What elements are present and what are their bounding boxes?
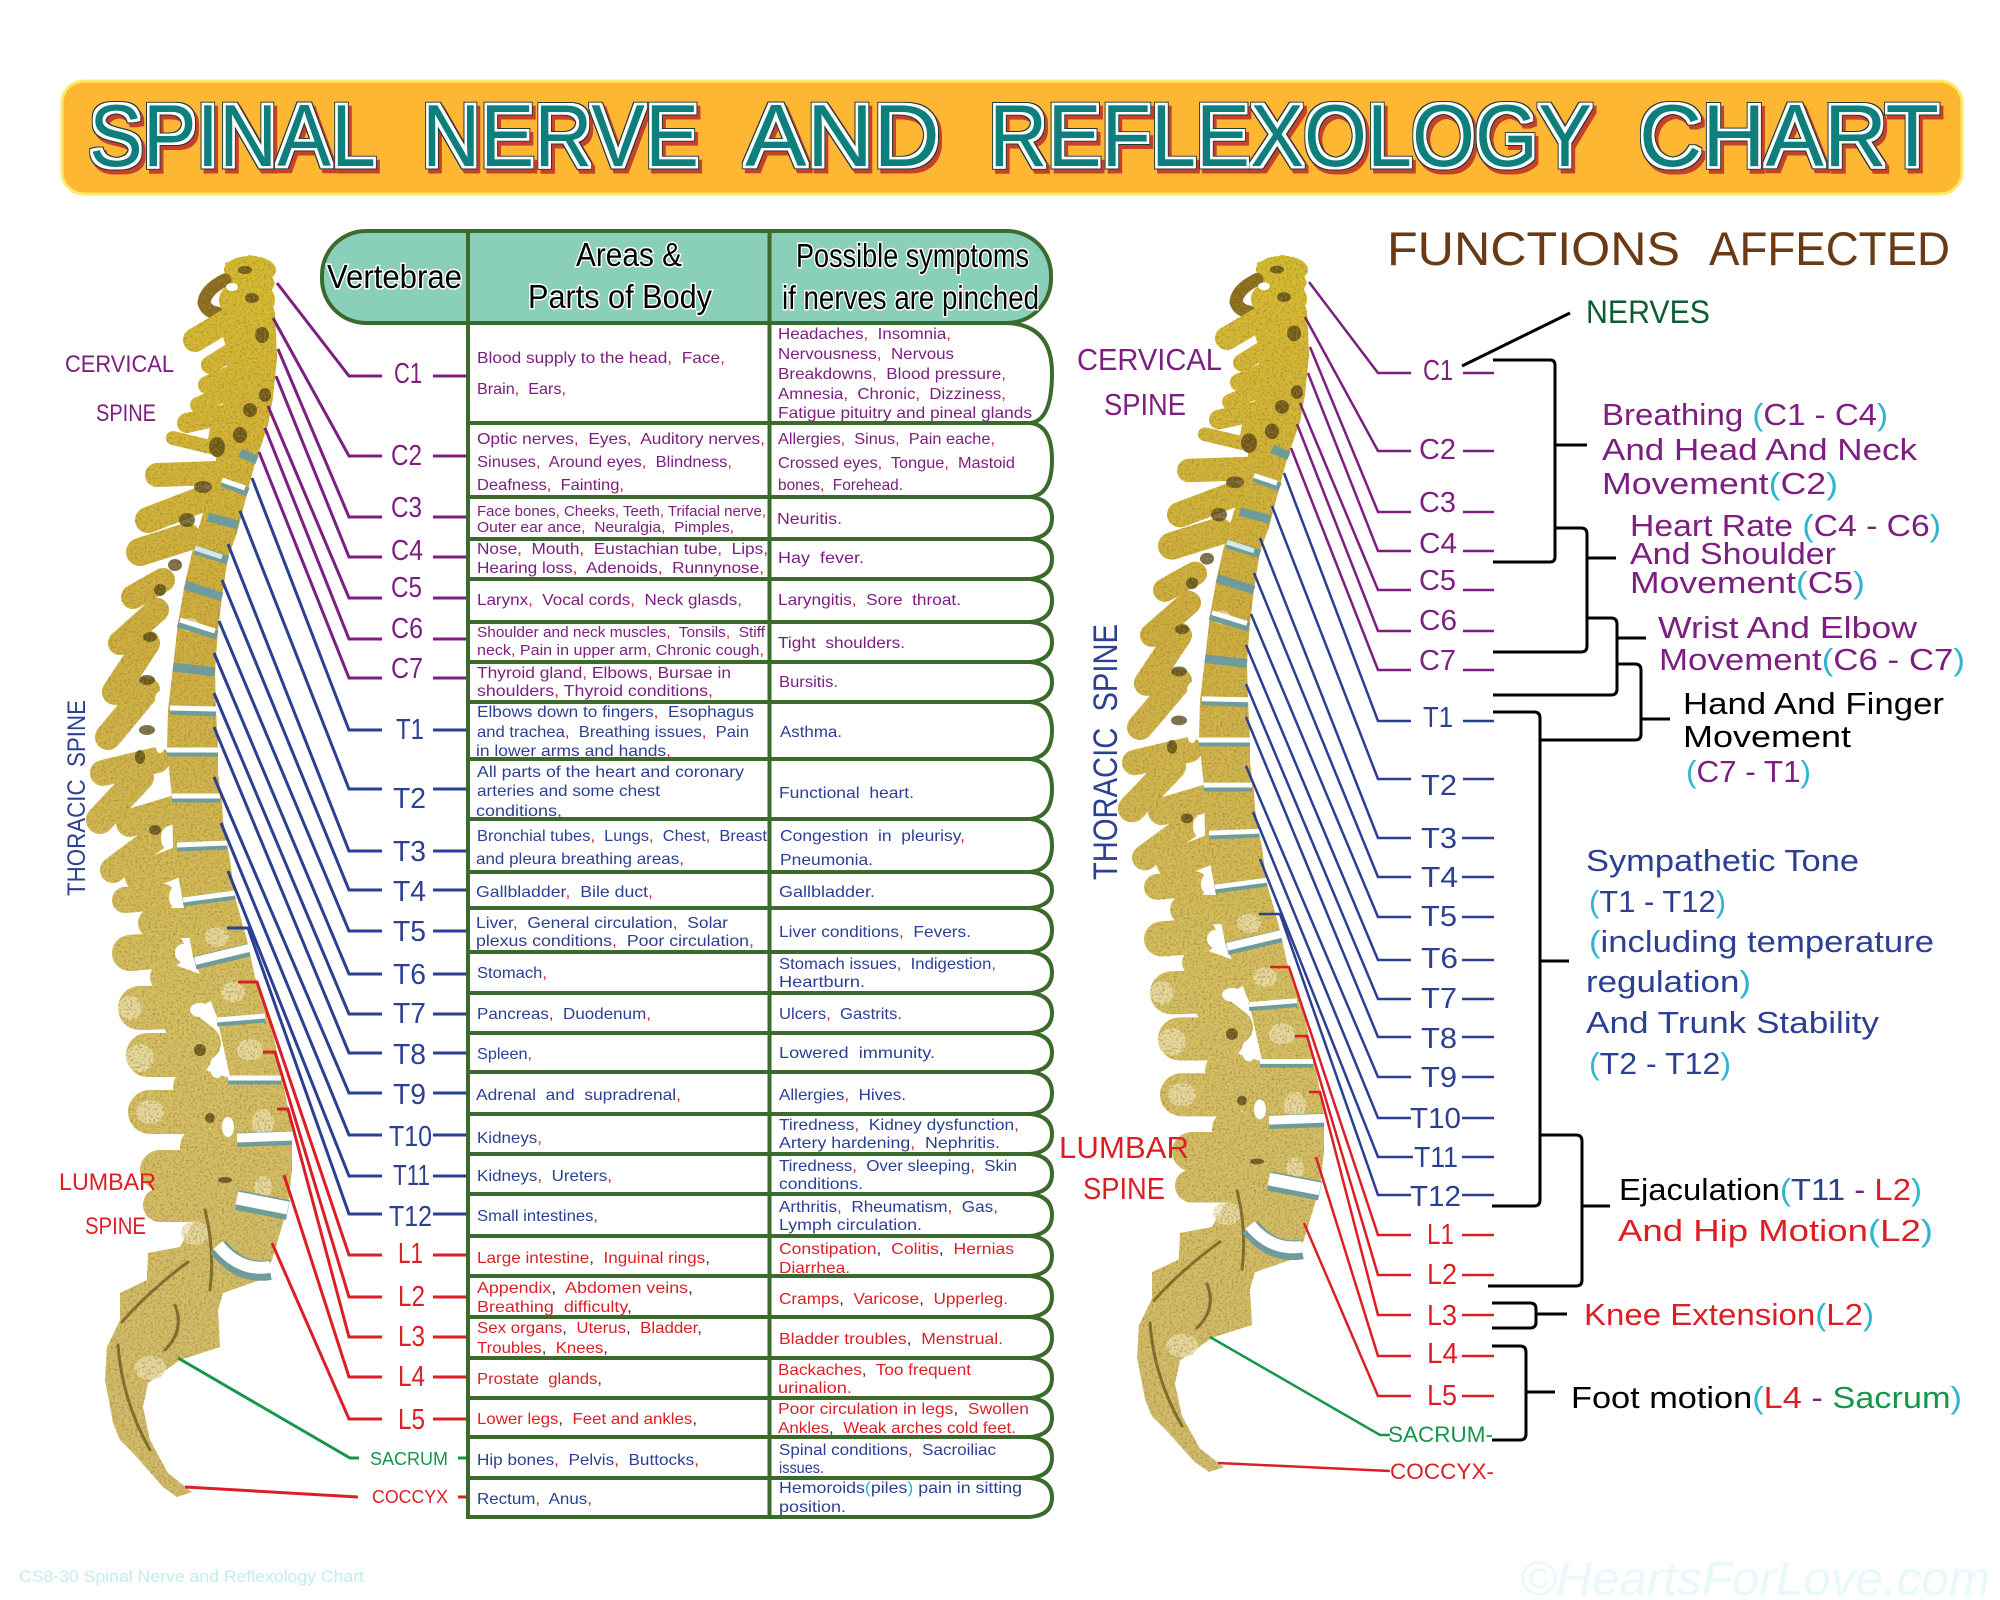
vertebra labels right: C3 [1419,487,1456,519]
vertebra labels right: C1 [1423,355,1453,387]
label: cervical spine right: CERVICAL [1077,342,1222,377]
bracket: foot motion [1492,1346,1555,1440]
label: cervical spine left: CERVICAL [65,351,174,378]
nerve lines left: thoracic [214,478,468,1214]
table row: C4: Hearing loss , Adenoids , Runnynose , [477,560,764,577]
table row: T8 [468,1033,1052,1072]
function: heart rate [1630,508,1941,600]
vertebra labels left: C3 [391,492,422,524]
vertebra labels right: T9 [1421,1062,1457,1094]
vertebra labels left: T4 [393,876,426,908]
vertebra labels right: C4 [1419,528,1457,560]
nerve lines right: thoracic [1246,473,1494,1195]
nerve lines right: lumbar [1270,967,1494,1396]
table row: C1: Breakdowns , Blood pressure , [778,366,1006,383]
table row: T12: Small intestines , [477,1208,598,1225]
function: sympathetic tone: (T2 - T12) [1589,1046,1731,1081]
illustration: spine left [100,255,292,1497]
bracket: heart rate [1493,528,1616,652]
label: cervical spine left [65,351,174,427]
function: hand and finger [1683,686,1944,789]
table row: L3: Bladder troubles , Menstrual. [779,1331,1003,1348]
function: breathing [1602,397,1918,501]
vertebra labels left: L4 [398,1361,425,1393]
function: heart rate: And Shoulder [1630,536,1836,571]
bracket: hand and finger [1540,664,1670,740]
table row: L3: Sex organs , Uterus, Bladder, [477,1320,702,1337]
vertebra labels left: T7 [393,998,426,1030]
vertebra labels right: L5 [1427,1380,1457,1412]
table row: C1: Brain, Ears, [477,381,566,398]
table row: L5: Lower legs , Feet and ankles , [477,1411,697,1428]
function: hand and finger: Hand And Finger [1683,686,1944,721]
table row: T5: Liver, General circulation , Solar [476,915,729,932]
table row: T7 [468,993,1052,1033]
table row: C1: Headaches , Insomnia , [778,326,951,343]
table row: T1 [468,702,1052,760]
label: lumbar spine right: SPINE [1083,1171,1165,1206]
table row: C5 [468,579,1052,622]
vertebra labels left: T3 [393,836,426,868]
table row: Coccyx: Hemoroids (piles) pain in sitting [779,1480,1022,1497]
table row: T1: Asthma. [780,724,842,741]
vertebra labels left: T6 [393,959,426,991]
vertebra labels right: T7 [1421,983,1457,1015]
heading: functions affected: AFFECTED [1709,222,1950,275]
vertebra labels right: T3 [1421,823,1457,855]
function: sympathetic tone: And Trunk Stability [1586,1005,1880,1040]
vertebra labels right: C2 [1419,434,1456,466]
vertebra labels right: C7 [1419,645,1456,677]
vertebra labels left: L1 [398,1238,423,1270]
title [89,86,1939,185]
nerve line left: coccyx [185,1487,468,1497]
table row: C2: Crossed eyes, Tongue, Mastoid [778,455,1015,472]
function: breathing: Breathing (C1 - C4) [1602,397,1888,432]
table row: T6: Heartburn. [779,974,865,991]
title: REFLEXOLOGY [989,86,1592,185]
title: CHART [1639,86,1939,185]
function: wrist and elbow: Wrist And Elbow [1658,610,1918,645]
table row: L4: Prostate glands , [477,1371,602,1388]
table row: T3 [468,819,1052,872]
table row: T7: Pancreas , Duodenum , [477,1006,651,1023]
bracket: ejaculation [1488,1135,1610,1286]
table row: L2: Cramps , Varicose , Upperleg. [779,1291,1008,1308]
table row: T10: Artery hardening , Nephritis. [779,1135,1000,1152]
illustration: spine right [1132,255,1324,1472]
bracket: wrist and elbow [1493,618,1646,695]
table row: Sacrum: Hip bones , Pelvis, Buttocks , [477,1452,699,1469]
vertebra labels left: T5 [393,916,426,948]
vertebra labels right: C5 [1419,565,1456,597]
nerve lines left: cervical [259,283,468,678]
table column dividers [468,323,770,1519]
function: heart rate: Heart Rate (C4 - C6 ) [1630,508,1941,543]
table row: L1: Diarrhea. [779,1260,850,1277]
vertebra labels left: C6 [391,613,423,645]
vertebra labels left: T11 [393,1160,430,1192]
nerve lines right: cervical [1291,282,1494,670]
function: ejaculation and hip motion [1618,1172,1933,1248]
function: sympathetic tone: Sympathetic Tone [1586,843,1859,878]
vertebra labels right: COCCYX- [1390,1459,1494,1484]
table row: T5 [468,908,1052,952]
vertebra labels left: T1 [396,714,424,746]
vertebra labels left: L2 [398,1281,425,1313]
nerve line right: sacrum [1210,1337,1390,1435]
table row: C5: Larynx, Vocal cords , Neck glasds , [477,592,742,609]
function: ejaculation and hip motion: Ejaculation (T11 - L2) [1619,1172,1922,1207]
table row: T5: plexus conditions , Poor circulation , [476,933,754,950]
table row: C7: Bursitis. [779,674,838,691]
vertebra labels right: T8 [1421,1023,1457,1055]
function: sympathetic tone: regulation ) [1586,964,1751,999]
label: cervical spine right [1077,342,1222,422]
vertebra labels right: SACRUM- [1388,1422,1493,1447]
function: foot motion: Foot motion (L4 - Sacrum ) [1571,1380,1962,1415]
vertebra labels right: T10 [1410,1103,1461,1135]
label: thoracic spine left: THORACIC SPINE [63,700,91,896]
label: lumbar spine left: LUMBAR [59,1169,156,1196]
label: lumbar spine left [59,1169,156,1240]
table row: T12 [468,1194,1052,1236]
vertebra labels right: T2 [1421,770,1457,802]
table header: Parts of Body [528,278,712,315]
table row: T2: All parts of the heart and coronary [477,764,744,781]
table row: T2 [468,759,1052,820]
vertebra labels left: COCCYX [372,1487,448,1507]
function: sympathetic tone: (T1 - T12) [1589,884,1726,919]
table row: L4: Backaches , Too frequent [778,1362,972,1379]
table row: T12: Arthritis, Rheumatism , Gas, [779,1199,998,1216]
function: hand and finger: (C7 - T1) [1686,754,1811,789]
table row: T4: Gallbladder. [779,884,875,901]
table row: C6: Shoulder and neck muscles , Tonsils, Stiff [477,624,766,641]
table row: C6: neck, Pain in upper arm , Chronic cough , [477,642,764,659]
table row: C7: Thyroid gland , Elbows , Bursae in [477,665,731,682]
table row: T8: Spleen, [477,1046,532,1063]
vertebra labels left: C4 [391,535,423,567]
label: lumbar spine right: LUMBAR [1059,1130,1189,1165]
function: sympathetic tone: (including temperature [1589,924,1934,959]
table row: L4 [468,1358,1052,1398]
table row: Coccyx: position. [779,1499,846,1516]
table row: T1: in lower arms and hands , [476,743,671,760]
table row: L2 [468,1276,1052,1317]
table row: L1: Constipation , Colitis , Hernias [779,1241,1014,1258]
table row: C1: Blood supply to the head , Face, [477,350,725,367]
table row: T9: Adrenal and supradrenal , [476,1087,681,1104]
vertebra labels left: L3 [398,1321,425,1353]
vertebra labels right: C6 [1419,605,1457,637]
vertebra labels right: L1 [1427,1219,1454,1251]
table header: Areas & [576,236,682,273]
vertebra labels right: T6 [1421,943,1458,975]
bracket: breathing [1493,360,1587,562]
vertebra labels left [370,358,448,1507]
footer: product code: CS8-30 Spinal Nerve and Reflexology Chart [19,1567,364,1586]
vertebra labels right: L4 [1427,1338,1458,1370]
table row: C1 [468,323,1052,423]
vertebra labels left: T2 [393,783,426,815]
table row: C3 [468,497,1052,539]
table row: C2 [468,423,1052,497]
table row: L5: Ankles, Weak arches cold feet. [778,1420,1016,1437]
title: NERVE [422,86,699,185]
table row: L4: urinalion. [778,1380,852,1397]
table row: C2: Sinuses, Around eyes, Blindness, [477,454,732,471]
vertebra labels left: T12 [389,1201,432,1233]
table row: T9 [468,1072,1052,1114]
table row: T1: Elbows down to fingers , Esophagus [477,704,754,721]
table row: T3: Congestion in pleurisy , [780,828,965,845]
table row: T10: Kidneys, [477,1130,542,1147]
table row: T11: Tiredness, Over sleeping , Skin [779,1158,1017,1175]
table row: T5: Liver conditions , Fevers. [779,924,971,941]
table row: T4: Gallbladder , Bile duct , [476,884,653,901]
table row: L1 [468,1236,1052,1277]
nerve line left: sacrum [178,1358,468,1458]
vertebra labels right: L2 [1427,1259,1457,1291]
table row: C7: shoulders , Thyroid conditions , [477,683,713,700]
table row: T10: Tiredness , Kidney dysfunction , [779,1117,1019,1134]
table row: C3: Outer ear ance , Neuralgia, Pimples, [477,519,734,536]
table row: T11: conditions. [779,1176,863,1193]
vertebra labels left: C5 [391,572,422,604]
nerve line right: coccyx [1218,1463,1390,1471]
table row: C4 [468,539,1052,579]
table row: C3: Face bones, Cheeks, Teeth, Trifacial nerve, [477,503,766,520]
table row: T6: Stomach, [477,965,547,982]
table row: C2: Optic nerves , Eyes, Auditory nerves , [477,431,765,448]
table row: T7: Ulcers, Gastrits. [779,1006,902,1023]
table row: C1: Fatigue pituitry and pineal glands [778,405,1032,422]
table row: T2: conditions , [476,803,562,820]
vertebra labels left: L5 [398,1404,425,1436]
vertebra labels right: L3 [1427,1300,1457,1332]
function: wrist and elbow: Movement (C6 - C7 ) [1659,642,1965,677]
table row: T9: Allergies , Hives. [779,1087,906,1104]
label: lumbar spine left: SPINE [85,1213,146,1240]
table row: T2: Functional heart. [779,785,914,802]
table row: C1: Amnesia, Chronic, Dizziness, [778,386,1006,403]
table row: T10 [468,1114,1052,1154]
table row: C4: Nose, Mouth , Eustachian tube , Lips, [477,541,768,558]
vertebra labels right: T12 [1410,1181,1461,1213]
table row: Sacrum [468,1437,1052,1478]
table row: C5: Laryngitis , Sore throat. [778,592,961,609]
label: nerves: NERVES [1586,294,1710,330]
table header: Vertebrae [327,258,462,295]
table row: Sacrum: Spinal conditions , Sacroiliac [779,1442,996,1459]
table row: L5: Poor circulation in legs , Swollen [778,1401,1029,1418]
function: breathing: And Head And Neck [1602,432,1918,467]
table row: T11 [468,1154,1052,1194]
table row: T4 [468,872,1052,908]
function: heart rate: Movement (C5) [1630,565,1865,600]
table row: T12: Lymph circulation. [779,1217,922,1234]
vertebra labels left: C1 [394,358,422,390]
table row: C4: Hay fever. [778,550,864,567]
table row: L5 [468,1398,1052,1437]
table row: L1: Large intestine , Inguinal rings , [477,1250,710,1267]
bracket: knee extension [1492,1303,1567,1328]
table row: C6 [468,622,1052,662]
vertebra labels right: T4 [1421,862,1458,894]
vertebra labels right [1388,355,1494,1484]
table row: Coccyx: Rectum, Anus, [477,1491,592,1508]
table row: C2: Deafness, Fainting, [477,477,624,494]
vertebra labels left: C7 [391,653,423,685]
table header: Possible symptoms [796,237,1029,274]
function: ejaculation and hip motion: And Hip Motion (L2) [1618,1213,1933,1248]
table row: L2: Breathing difficulty , [477,1299,632,1316]
table row: L3: Troubles, Knees, [477,1340,608,1357]
table row: T3: Bronchial tubes, Lungs, Chest, Breast [477,828,768,845]
table header [322,231,1051,323]
vertebra labels right: T1 [1423,702,1453,734]
table row: T3: Pneumonia. [780,852,873,869]
vertebra labels left: T8 [393,1039,426,1071]
vertebra labels left: T10 [389,1121,432,1153]
title: AND [745,86,940,185]
title: SPINAL [89,86,376,185]
nerve lines left: lumbar [238,982,468,1419]
table row: T11: Kidneys, Ureters, [477,1168,612,1185]
vertebra labels right: T5 [1421,901,1457,933]
label: cervical spine left: SPINE [96,400,156,427]
label: cervical spine right: SPINE [1104,387,1186,422]
vertebra labels left: T9 [393,1079,426,1111]
table row: C7 [468,662,1052,702]
bracket: sympathetic tone [1492,712,1569,1206]
table row: T2: arteries and some chest [477,783,661,800]
table row: C3: Neuritis. [777,511,842,528]
heading: functions affected [1387,222,1950,275]
table header: if nerves are pinched [782,279,1039,316]
function: hand and finger: Movement [1683,719,1851,754]
table row: Coccyx [468,1478,1052,1517]
vertebra labels left: C2 [391,440,422,472]
label: thoracic spine right: THORACIC SPINE [1087,624,1125,880]
table row: T6: Stomach issues , Indigestion, [779,956,996,973]
table row: T8: Lowered immunity. [779,1045,935,1062]
table row: C2: Allergies, Sinus, Pain eache, [778,431,995,448]
function: wrist and elbow [1658,610,1965,677]
table row: C2: bones, Forehead. [778,477,903,494]
table row: L2: Appendix , Abdomen veins , [477,1280,693,1297]
table row: C1: Nervousness , Nervous [778,346,954,363]
table row: L3 [468,1317,1052,1358]
vertebra labels right: T11 [1414,1142,1458,1174]
vertebra labels left: SACRUM [370,1449,448,1469]
function: breathing: Movement (C2) [1602,466,1838,501]
table row: T3: and pleura breathing areas , [476,851,684,868]
table row: T1: and trachea, Breathing issues , Pain [477,724,749,741]
table row: Sacrum: issues. [779,1460,824,1477]
banner background [62,81,1962,194]
heading: functions affected: FUNCTIONS [1387,222,1680,275]
table row: T6 [468,952,1052,993]
function: knee extension: Knee Extension (L2) [1584,1297,1874,1332]
table row: C6: Tight shoulders. [778,635,905,652]
pointer line: nerves [1462,313,1570,366]
function: sympathetic tone [1586,843,1934,1081]
label: lumbar spine right [1059,1130,1189,1206]
